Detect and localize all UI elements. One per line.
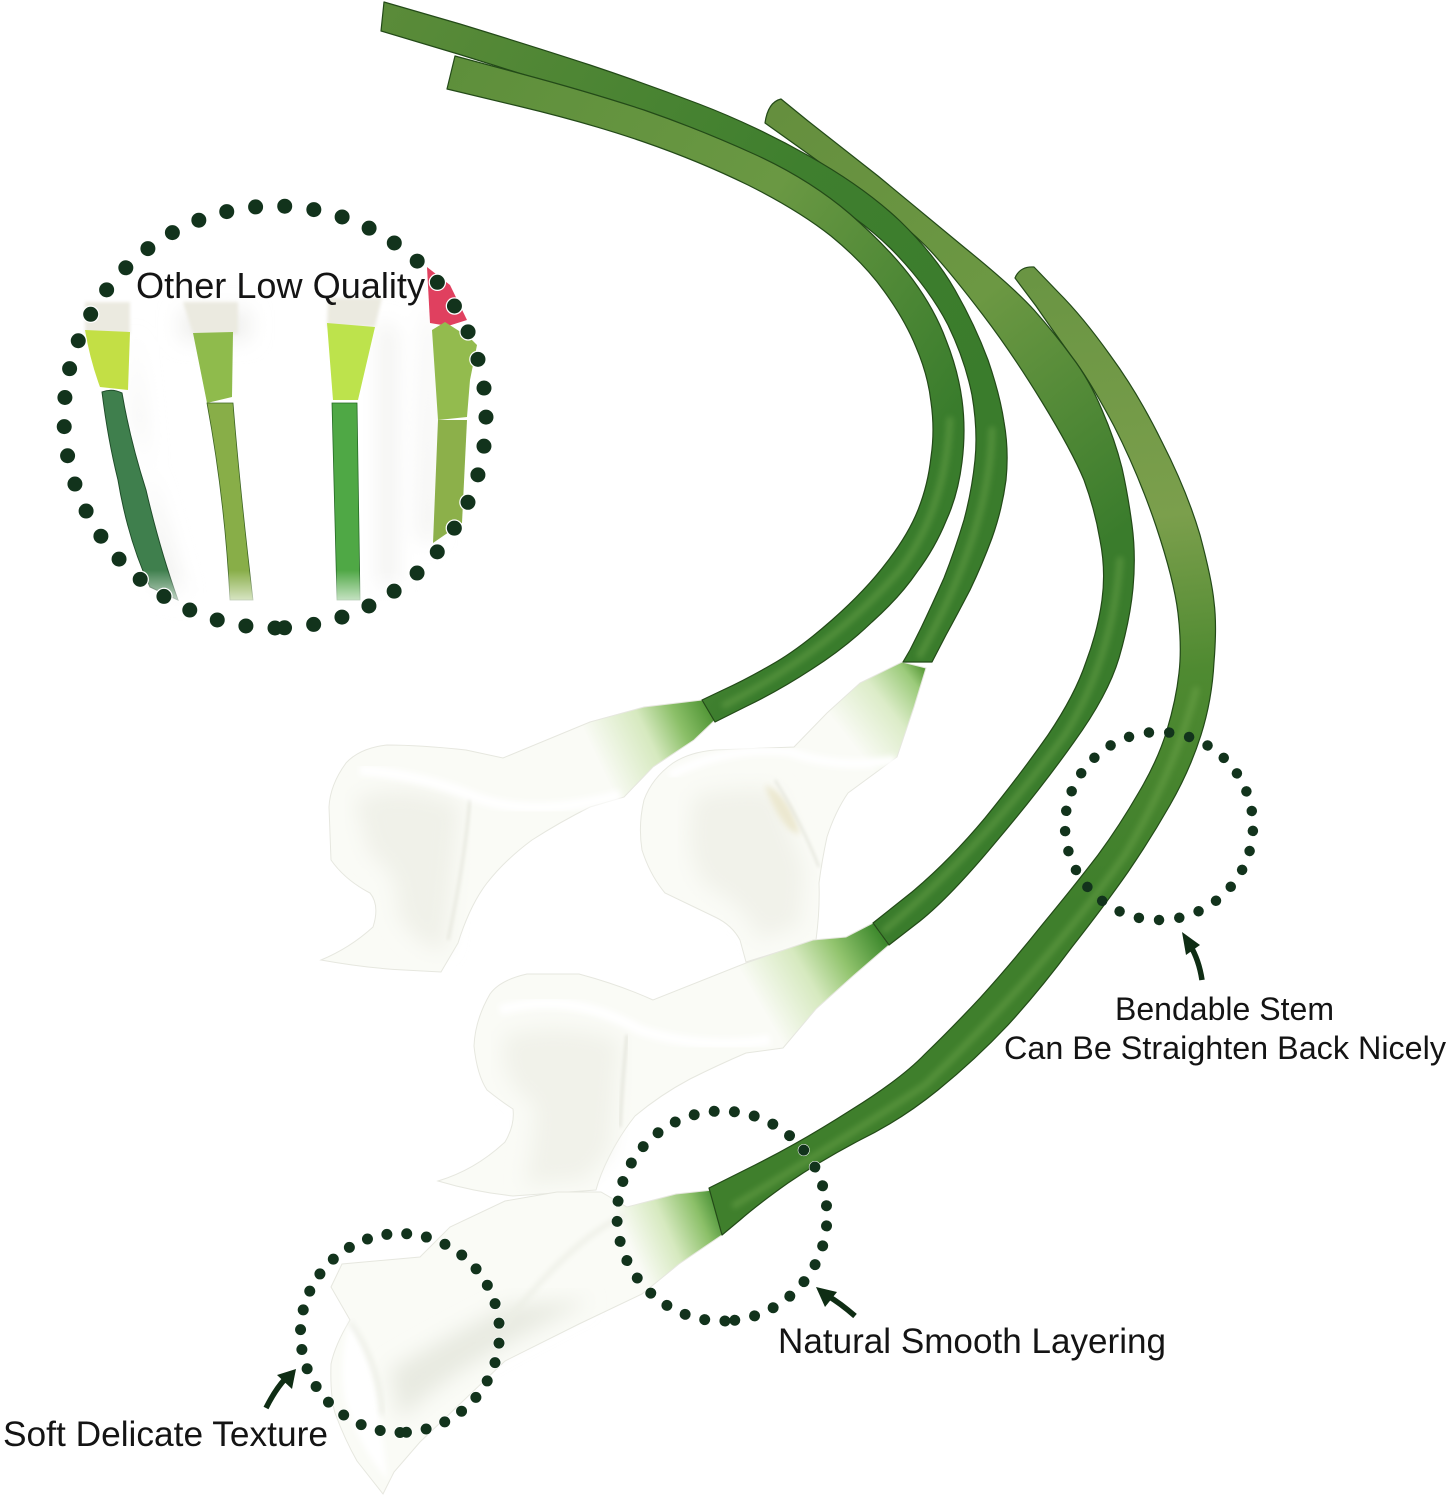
- petal shading: [342, 1215, 625, 1480]
- arrow: to bendable circle: [1182, 932, 1202, 980]
- inset stem three: [327, 298, 382, 600]
- flower one: [321, 700, 715, 972]
- stems group: [381, 2, 1216, 1235]
- stem: first, to upper left flower: [447, 56, 964, 722]
- heading: other low quality: Other Low Quality: [136, 265, 425, 306]
- petal shading: [670, 751, 895, 940]
- petal shading: [500, 1003, 770, 1185]
- label: bendable stem: Bendable Stem: [1115, 991, 1334, 1027]
- inset fade at bottom: [90, 570, 440, 615]
- dotted circle: soft delicate texture: [300, 1234, 500, 1432]
- inset photo: other low quality stems: [85, 267, 477, 615]
- flower three: [438, 923, 889, 1196]
- dotted circle: bendable stem: [1060, 727, 1258, 925]
- stem: third, to middle flower: [765, 99, 1134, 945]
- inset stem four: [427, 267, 477, 543]
- inset stem two: [183, 302, 253, 600]
- flower four: [331, 1190, 722, 1494]
- stem: fourth, longest stem to lower flower: [709, 267, 1216, 1235]
- label: can be straighten back nicely: Can Be Straighten Back Nicely: [1004, 1030, 1447, 1066]
- flower two: [640, 662, 926, 962]
- stem: second, to upper right flower: [381, 2, 1007, 662]
- label: soft delicate texture: Soft Delicate Texture: [3, 1414, 328, 1454]
- stem highlights: [725, 420, 1196, 1205]
- inset stem one: [85, 302, 178, 600]
- petal shading: [355, 770, 620, 950]
- dotted circle: other low quality: [64, 206, 486, 628]
- arrow: to texture circle: [266, 1369, 296, 1408]
- label: natural smooth layering: Natural Smooth Layering: [778, 1322, 1166, 1361]
- arrow: to layering circle: [816, 1287, 855, 1316]
- inset soft background shadows: [135, 300, 435, 600]
- dotted circle: natural smooth layering: [614, 1108, 830, 1324]
